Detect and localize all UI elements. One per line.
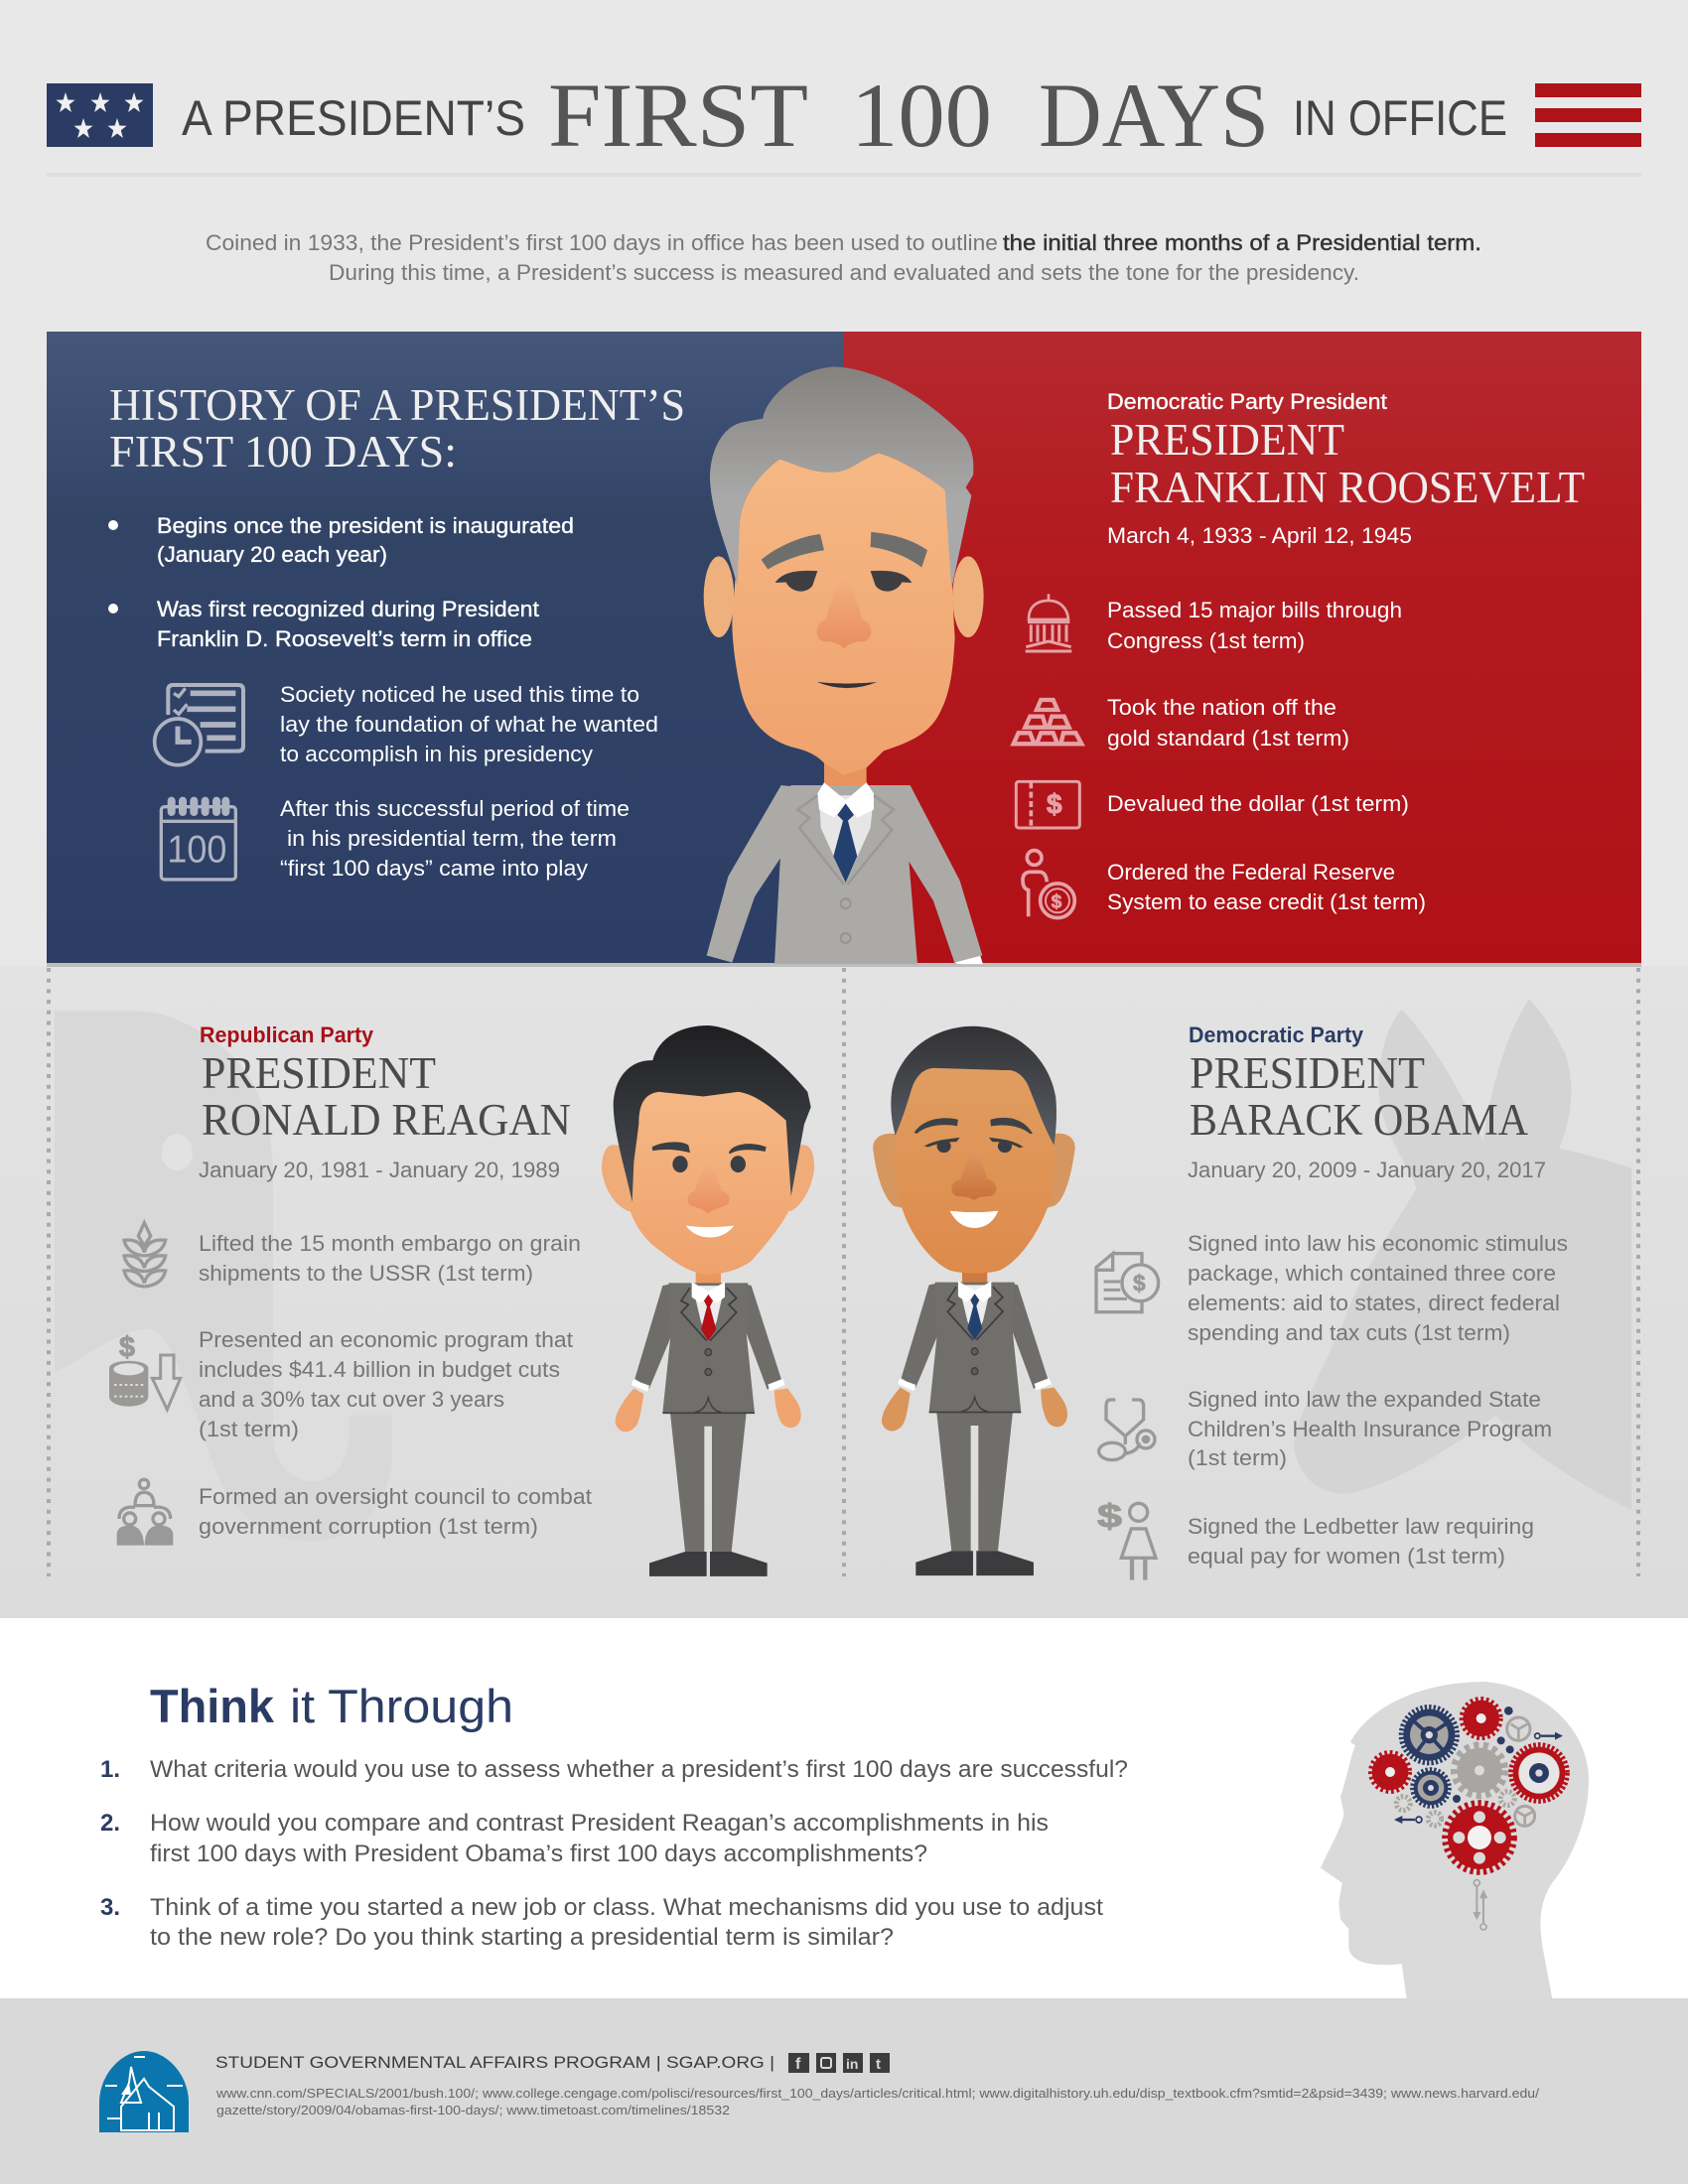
gray gear center	[1455, 1745, 1504, 1795]
hands	[616, 1388, 801, 1432]
hair	[710, 366, 973, 589]
intro text	[206, 230, 1481, 285]
neck	[696, 1265, 721, 1293]
text: oversight council: Formed an oversight council to combat	[199, 1484, 592, 1509]
text: economic program: Presented an economic program that	[199, 1327, 573, 1352]
background silhouette: republican elephant	[55, 1011, 392, 1542]
question 2: 2.	[100, 1810, 120, 1837]
text: ordered the federal reserve	[1107, 860, 1426, 914]
text: ledbetter: equal pay for women (1st term)	[1188, 1544, 1505, 1569]
bullet list: history	[108, 513, 574, 651]
small gray gears	[1396, 1717, 1535, 1826]
red gear big	[1446, 1804, 1513, 1871]
heading: think it through: Think	[150, 1680, 275, 1732]
question 2: first 100 days with President Obama’s first 100 days accomplishments?	[150, 1841, 927, 1867]
text: took the nation off gold: gold standard (1st term)	[1107, 726, 1349, 751]
text: economic program: (1st term)	[199, 1417, 299, 1441]
title: A PRESIDENT’S	[182, 90, 525, 146]
bullet list: history: Franklin D. Roosevelt’s term in office	[157, 626, 532, 651]
bullet list: history: (January 20 each year)	[157, 542, 387, 567]
social icons: f	[795, 2056, 801, 2073]
text block: Reagan heading: RONALD REAGAN	[202, 1095, 571, 1145]
text: ordered the federal reserve: System to ease credit (1st term)	[1107, 889, 1426, 914]
heading: history of a president's first 100 days	[109, 380, 685, 477]
hair	[614, 1025, 811, 1202]
section: think it through	[0, 1618, 1688, 1998]
nose	[951, 1149, 996, 1200]
text: oversight council	[199, 1484, 592, 1539]
heading: think it through: it Through	[290, 1680, 513, 1732]
brows	[762, 532, 927, 569]
icon: oversight council	[118, 1479, 172, 1544]
footer references: gazette/story/2009/04/obamas-first-100-days/; www.timetoast.com/timelines/18532	[216, 2103, 730, 2117]
intro text: Coined in 1933, the President’s first 100 days in office has been used to outline	[206, 230, 998, 255]
question 1: What criteria would you use to assess whether a president’s first 100 days are successful?	[150, 1756, 1128, 1783]
social icons: in	[846, 2056, 858, 2072]
navy gear large	[1402, 1707, 1457, 1762]
hands	[882, 1388, 1067, 1432]
red gear left	[1371, 1753, 1409, 1791]
icon: document with coin	[1096, 1254, 1159, 1312]
text block: Obama heading: BARACK OBAMA	[1190, 1095, 1528, 1145]
text: ledbetter: Signed the Ledbetter law requiring	[1188, 1514, 1534, 1539]
icon: coins and down arrow	[109, 1332, 181, 1410]
eyes	[775, 571, 912, 592]
text: economic program: includes $41.4 billion in budget cuts	[199, 1357, 560, 1382]
text: after this successful period: in his presidential term, the term	[287, 826, 617, 851]
head silhouette	[1321, 1682, 1589, 1998]
eyes	[672, 1156, 688, 1172]
text: society noticed: to accomplish in his presidency	[280, 742, 593, 766]
title: FIRST	[548, 65, 808, 166]
text: after this successful period	[280, 796, 630, 881]
icon: dollar bill	[1016, 781, 1079, 828]
arrows	[1394, 1732, 1563, 1930]
text: lifted the embargo: shipments to the USSR (1st term)	[199, 1261, 533, 1286]
icon: dollar and woman	[1097, 1498, 1156, 1580]
text: economic stimulus	[1188, 1231, 1568, 1345]
text block: Reagan heading: January 20, 1981 - January 20, 1989	[199, 1158, 560, 1182]
icon: coins and down arrow: $	[119, 1332, 135, 1364]
text block: Roosevelt heading	[1107, 389, 1585, 548]
text block: Roosevelt heading: March 4, 1933 - April 12, 1945	[1107, 523, 1412, 548]
text block: Obama heading: Democratic Party	[1189, 1023, 1364, 1047]
text block: Obama heading: PRESIDENT	[1190, 1048, 1425, 1098]
header: flag stripes block	[1535, 83, 1641, 147]
icon: person with coin: $	[1052, 891, 1062, 912]
text: economic program	[199, 1327, 573, 1441]
text: economic stimulus: Signed into law his economic stimulus	[1188, 1231, 1568, 1256]
text block: Roosevelt heading: Democratic Party President	[1107, 389, 1387, 414]
nose	[817, 577, 871, 648]
icon: person with coin	[1023, 851, 1074, 918]
nose	[688, 1162, 730, 1213]
text: children's health: Signed into law the expanded State	[1188, 1387, 1541, 1412]
neck	[824, 743, 867, 801]
question 2	[100, 1810, 1049, 1867]
question 3: Think of a time you started a new job or class. What mechanisms did you use to adjust	[150, 1894, 1103, 1921]
ears	[602, 1145, 814, 1211]
text block: Obama heading: January 20, 2009 - January 20, 2017	[1188, 1158, 1546, 1182]
text: lifted the embargo: Lifted the 15 month embargo on grain	[199, 1231, 581, 1256]
suit	[707, 782, 983, 964]
ears	[873, 1134, 1075, 1208]
text block: Reagan heading: Republican Party	[200, 1023, 374, 1047]
social icons	[788, 2053, 890, 2073]
text: economic stimulus: spending and tax cuts (1st term)	[1188, 1320, 1510, 1345]
brows	[914, 1118, 1033, 1134]
text: economic stimulus: package, which contained three core	[1188, 1261, 1556, 1286]
neck	[962, 1265, 987, 1292]
panel: history and Roosevelt	[47, 332, 1641, 967]
text: ledbetter	[1188, 1514, 1534, 1569]
social icons: t	[876, 2056, 881, 2073]
footer band	[0, 1998, 1688, 2184]
illustration: head with gears	[1321, 1682, 1589, 1998]
text block: Roosevelt heading: FRANKLIN ROOSEVELT	[1110, 463, 1585, 512]
brows	[652, 1142, 767, 1154]
footer references	[215, 2086, 1539, 2117]
text: society noticed	[280, 682, 658, 766]
figure: President Roosevelt	[704, 366, 984, 964]
icon: dollar and woman: $	[1097, 1498, 1123, 1535]
text: passed 15 major bills: Passed 15 major bills through	[1107, 598, 1402, 622]
smile	[686, 1226, 734, 1238]
text: society noticed: lay the foundation of what he wanted	[280, 712, 658, 737]
text block: Obama heading	[1188, 1023, 1546, 1182]
icon: document with coin: $	[1133, 1271, 1146, 1297]
header: flag stars block	[47, 83, 153, 147]
text: society noticed: Society noticed he used this time to	[280, 682, 639, 707]
navy dots	[1453, 1706, 1514, 1803]
heading: think it through	[150, 1680, 513, 1732]
figure: President Reagan	[602, 1025, 814, 1576]
mouth	[817, 682, 877, 688]
text: economic stimulus: elements: aid to states, direct federal	[1188, 1291, 1560, 1315]
question 3: to the new role? Do you think starting a presidential term is similar?	[150, 1924, 894, 1951]
text: economic program: and a 30% tax cut over 3 years	[199, 1387, 504, 1412]
smile	[950, 1211, 998, 1228]
text block: Roosevelt heading: PRESIDENT	[1110, 415, 1344, 465]
text: children's health: Children’s Health Insurance Program	[1188, 1417, 1552, 1441]
question 3	[100, 1894, 1103, 1951]
question 1: 1.	[100, 1756, 120, 1783]
heading: history of a president's first 100 days: FIRST 100 DAYS:	[109, 427, 457, 477]
text: devalued the dollar: Devalued the dollar (1st term)	[1107, 791, 1409, 816]
heading: history of a president's first 100 days: HISTORY OF A PRESIDENT’S	[109, 380, 685, 430]
text: children's health: (1st term)	[1188, 1445, 1287, 1470]
question 2: How would you compare and contrast President Reagan’s accomplishments in his	[150, 1810, 1049, 1837]
text: took the nation off gold: Took the nation off the	[1107, 695, 1336, 720]
section background: lower comparison	[0, 966, 1688, 1618]
title	[182, 65, 1507, 166]
icon: checklist with clock	[155, 685, 243, 765]
text: took the nation off gold	[1107, 695, 1349, 751]
icon: capitol	[1026, 594, 1071, 651]
question 3: 3.	[100, 1894, 120, 1921]
face	[894, 1068, 1055, 1274]
text: passed 15 major bills: Congress (1st term)	[1107, 628, 1305, 653]
red ring gear	[1511, 1745, 1567, 1801]
text: oversight council: government corruption (1st term)	[199, 1514, 538, 1539]
bullet list: history: Begins once the president is inaugurated	[157, 513, 574, 538]
face	[732, 453, 955, 775]
icon: stethoscope	[1099, 1400, 1155, 1460]
background silhouette: democratic donkey	[1294, 1000, 1631, 1510]
text: lifted the embargo	[199, 1231, 581, 1286]
logo: student governmental affairs program	[99, 2051, 189, 2132]
red gear top	[1462, 1700, 1500, 1737]
icon: dollar bill: $	[1047, 788, 1062, 819]
title: IN OFFICE	[1293, 90, 1507, 146]
text block: Reagan heading	[199, 1023, 571, 1182]
text: ordered the federal reserve: Ordered the Federal Reserve	[1107, 860, 1395, 885]
text: after this successful period: “first 100 days” came into play	[280, 856, 588, 881]
icon: 100 calendar: 100	[167, 828, 226, 872]
icon: wheat	[124, 1223, 166, 1287]
face	[631, 1092, 790, 1275]
text block: Reagan heading: PRESIDENT	[202, 1048, 436, 1098]
intro text: the initial three months of a Presidential term.	[1003, 230, 1481, 255]
footer organisation line: STUDENT GOVERNMENTAL AFFAIRS PROGRAM | SGAP.ORG |	[215, 2053, 774, 2072]
navy gear small	[1412, 1769, 1450, 1807]
text: passed 15 major bills	[1107, 598, 1402, 653]
intro text: During this time, a President’s success is measured and evaluated and sets the tone for the presidency.	[329, 260, 1359, 285]
hair	[891, 1026, 1056, 1146]
title: 100	[851, 65, 992, 166]
figure: President Obama	[873, 1026, 1075, 1575]
footer references: www.cnn.com/SPECIALS/2001/bush.100/; www.college.cengage.com/polisci/resources/first_100_days/articles/critical.html; www.digitalhistory.uh.edu/disp_textbook.cfm?smtid=2&psid=3439; www.news.harvard.edu/	[215, 2086, 1539, 2101]
ears	[704, 556, 984, 637]
title: DAYS	[1039, 65, 1269, 166]
text: after this successful period: After this successful period of time	[280, 796, 630, 821]
eyes	[924, 1138, 1024, 1148]
bullet list: history: Was first recognized during President	[157, 597, 539, 621]
icon: gold bars	[1014, 700, 1081, 744]
text: children's health	[1188, 1387, 1552, 1470]
icon: 100 calendar	[161, 797, 235, 880]
